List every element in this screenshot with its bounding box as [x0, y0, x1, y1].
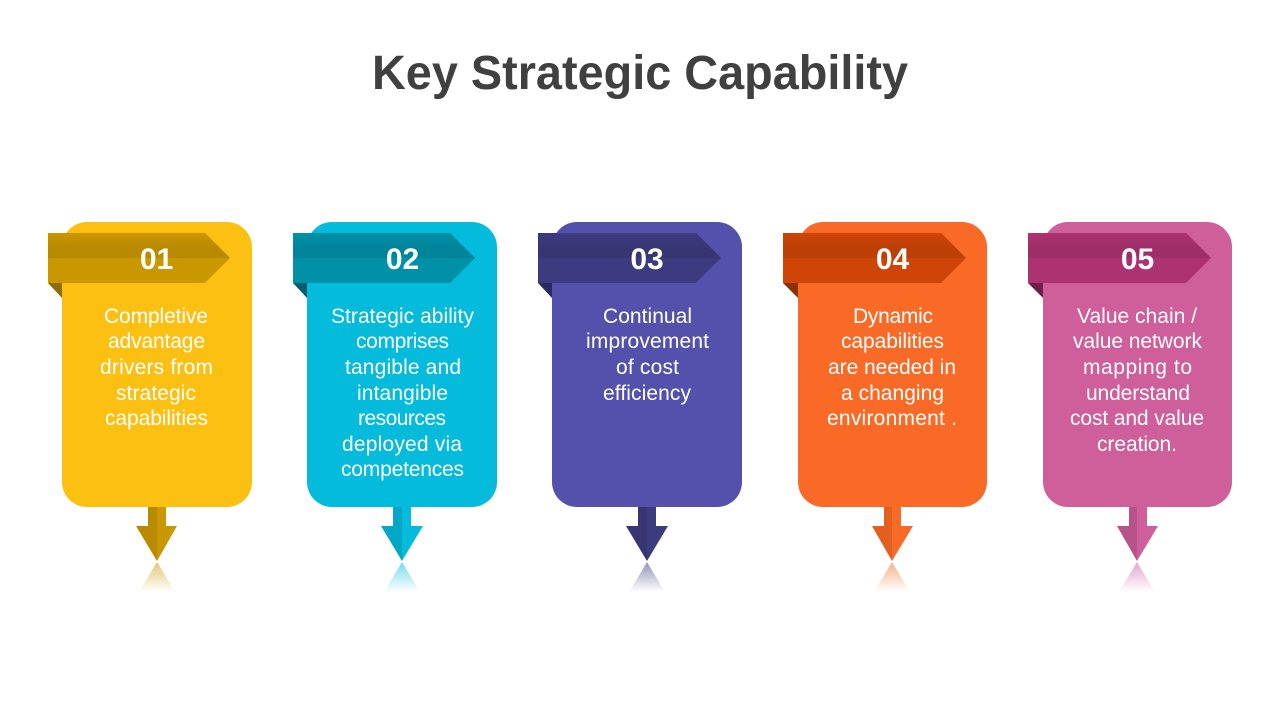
number 05: 05 [1121, 243, 1154, 276]
text: capability 01: advantage [108, 330, 205, 353]
panel: capability 01 [48, 222, 252, 592]
text: capability 04: a changing [841, 382, 944, 405]
text: capability 03: efficiency [603, 382, 692, 405]
text: capability 04: Dynamic [853, 305, 933, 328]
arrow 02 [381, 507, 423, 592]
text: capability 02: competences [341, 458, 464, 481]
panel: capability 02 [293, 222, 497, 592]
card background 02 [307, 222, 497, 507]
panel: capability 05 [1028, 222, 1232, 592]
arrow 04 [872, 507, 913, 592]
card background 04 [798, 222, 987, 507]
text: capability 02: intangible [357, 382, 448, 405]
arrow 03 [626, 507, 668, 592]
text: capability 02: resources [358, 407, 446, 430]
text: capability 05 [1070, 305, 1204, 456]
text: capability 04: are needed in [828, 356, 956, 379]
text: capability 04: environment . [827, 407, 957, 430]
text: capability 02: tangible and [345, 356, 461, 379]
text: capability 03: of cost [616, 356, 679, 379]
text: capability 05: Value chain / [1077, 305, 1197, 328]
card background 03 [552, 222, 742, 507]
text: capability 02: Strategic ability [331, 305, 474, 328]
text: capability 02: deployed via [342, 433, 462, 456]
number 04: 04 [876, 243, 909, 276]
text: capability 05: understand [1086, 382, 1190, 405]
text: capability 01: Completive [104, 305, 208, 328]
text: capability 04 [827, 305, 957, 430]
number 03: 03 [630, 243, 664, 276]
number 01: 01 [140, 243, 173, 276]
arrow 01 [136, 507, 177, 592]
text: capability 03: Continual [603, 305, 692, 328]
text: capability 01: strategic [116, 382, 196, 405]
ribbon 04 [783, 233, 966, 298]
ribbon 03 [538, 233, 721, 298]
card background 05 [1043, 222, 1232, 507]
title: Key Strategic Capability [372, 47, 908, 100]
text: capability 05: mapping to [1083, 356, 1192, 379]
panel: capability 03 [538, 222, 742, 592]
arrow 05 [1117, 507, 1158, 592]
card background 01 [62, 222, 252, 507]
ribbon 01 [48, 233, 230, 298]
text: capability 01 [100, 305, 213, 430]
number 02: 02 [386, 243, 419, 276]
ribbon 05 [1028, 233, 1211, 298]
text: capability 03: improvement [586, 330, 709, 353]
text: capability 01: drivers from [100, 356, 213, 379]
text: capability 05: value network [1073, 330, 1202, 353]
panel: capability 04 [783, 222, 987, 592]
text: capability 02 [331, 305, 474, 481]
ribbon 02 [293, 233, 475, 298]
text: capability 02: comprises [356, 330, 449, 353]
text: capability 04: capabilities [841, 330, 944, 353]
text: capability 03 [586, 305, 709, 405]
text: capability 05: creation. [1097, 433, 1177, 456]
text: capability 05: cost and value [1070, 407, 1204, 430]
text: capability 01: capabilities [105, 407, 208, 430]
